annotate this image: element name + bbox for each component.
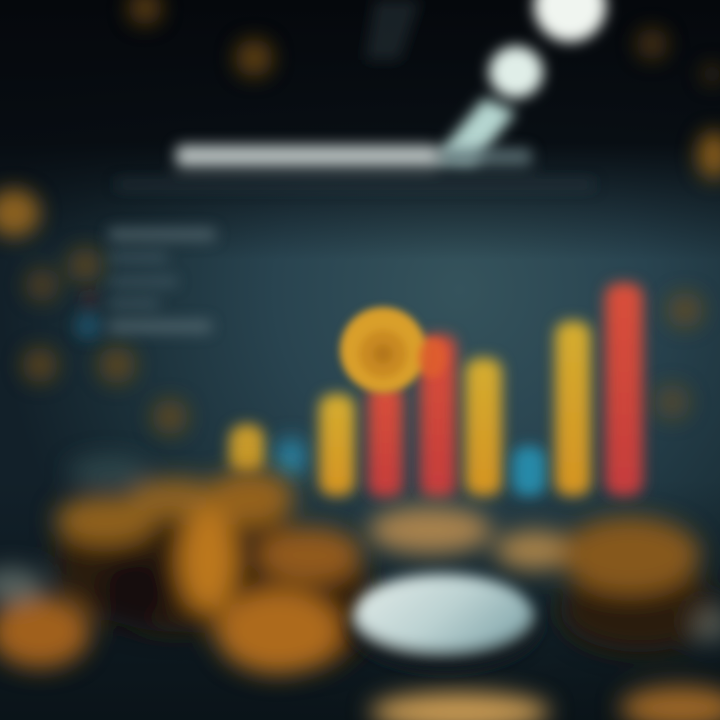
bar 9 red <box>605 283 643 496</box>
spotlight beam <box>365 0 606 164</box>
bar 4 red <box>368 385 403 497</box>
heading (illegible in source) <box>115 145 595 189</box>
bar 5 red <box>420 335 456 497</box>
pile of golden rocks, left <box>0 456 380 674</box>
bar 8 yellow <box>555 321 591 496</box>
bar 1 yellow <box>229 424 265 474</box>
text block: left legend (illegible in source) <box>74 228 216 340</box>
icon: gold coin <box>340 307 446 393</box>
pile of golden rocks, right <box>368 506 720 720</box>
floating gold bokeh dots <box>0 0 720 435</box>
bar chart <box>229 283 643 497</box>
bar 3 yellow <box>319 394 355 496</box>
bar 6 yellow <box>465 358 502 496</box>
white plate <box>349 574 541 671</box>
bar 7 blue <box>512 446 546 496</box>
bar 2 blue <box>276 438 306 476</box>
